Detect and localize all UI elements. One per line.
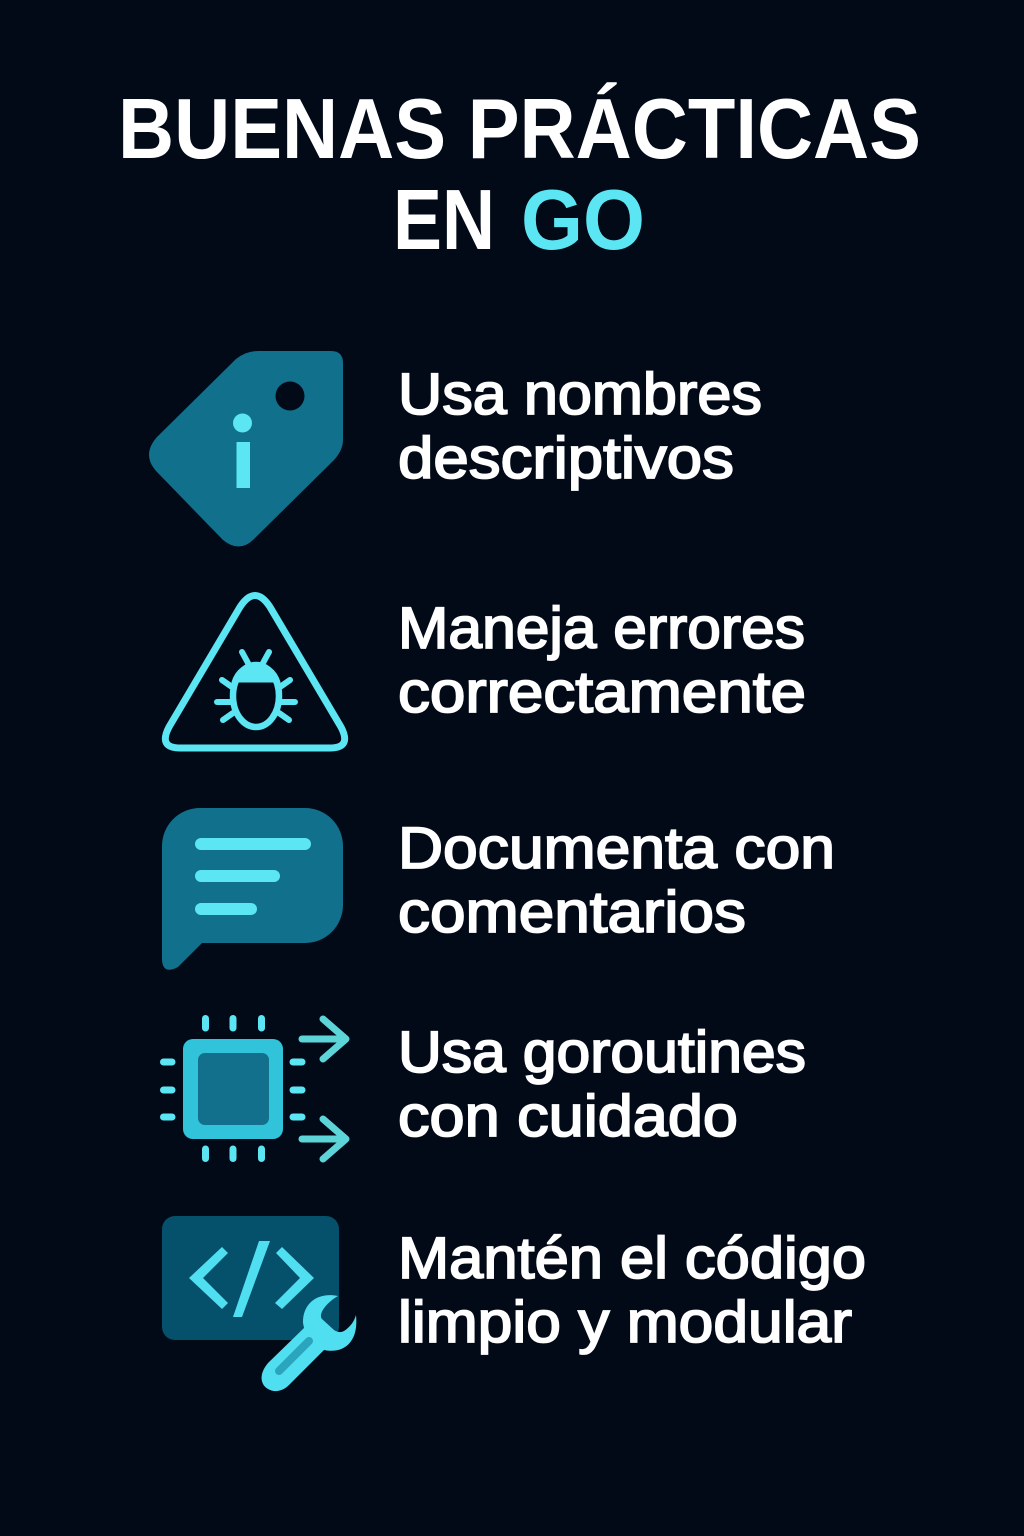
text: mantén el código limpio y modular: Mantén el código <box>398 1226 866 1291</box>
text: usa goroutines con cuidado: Usa goroutines <box>398 1020 806 1085</box>
text: documenta con comentarios: comentarios <box>398 880 746 945</box>
text: mantén el código limpio y modular: limpio y modular <box>398 1290 852 1355</box>
text: usa nombres descriptivos <box>398 362 762 491</box>
text: documenta con comentarios: Documenta con <box>398 816 835 881</box>
icon: speech bubble <box>162 808 343 970</box>
title: GO <box>521 173 645 268</box>
icon: processor with arrows <box>164 1018 346 1159</box>
title: EN <box>393 173 495 268</box>
title: BUENAS PRÁCTICAS <box>118 82 921 177</box>
text: documenta con comentarios <box>398 816 835 945</box>
text: mantén el código limpio y modular <box>398 1226 866 1355</box>
text: usa nombres descriptivos: Usa nombres <box>398 362 762 427</box>
text: maneja errores correctamente: Maneja errores <box>398 596 805 661</box>
text: usa goroutines con cuidado <box>398 1020 806 1149</box>
text: usa nombres descriptivos: descriptivos <box>398 426 734 491</box>
text: maneja errores correctamente <box>398 596 806 725</box>
text: maneja errores correctamente: correctamente <box>398 660 806 725</box>
text: usa goroutines con cuidado: con cuidado <box>398 1084 738 1149</box>
icon: tag with info symbol <box>149 351 343 546</box>
title <box>118 82 921 268</box>
icon: code window with wrench <box>162 1216 356 1391</box>
icon: warning triangle with bug <box>165 596 345 748</box>
